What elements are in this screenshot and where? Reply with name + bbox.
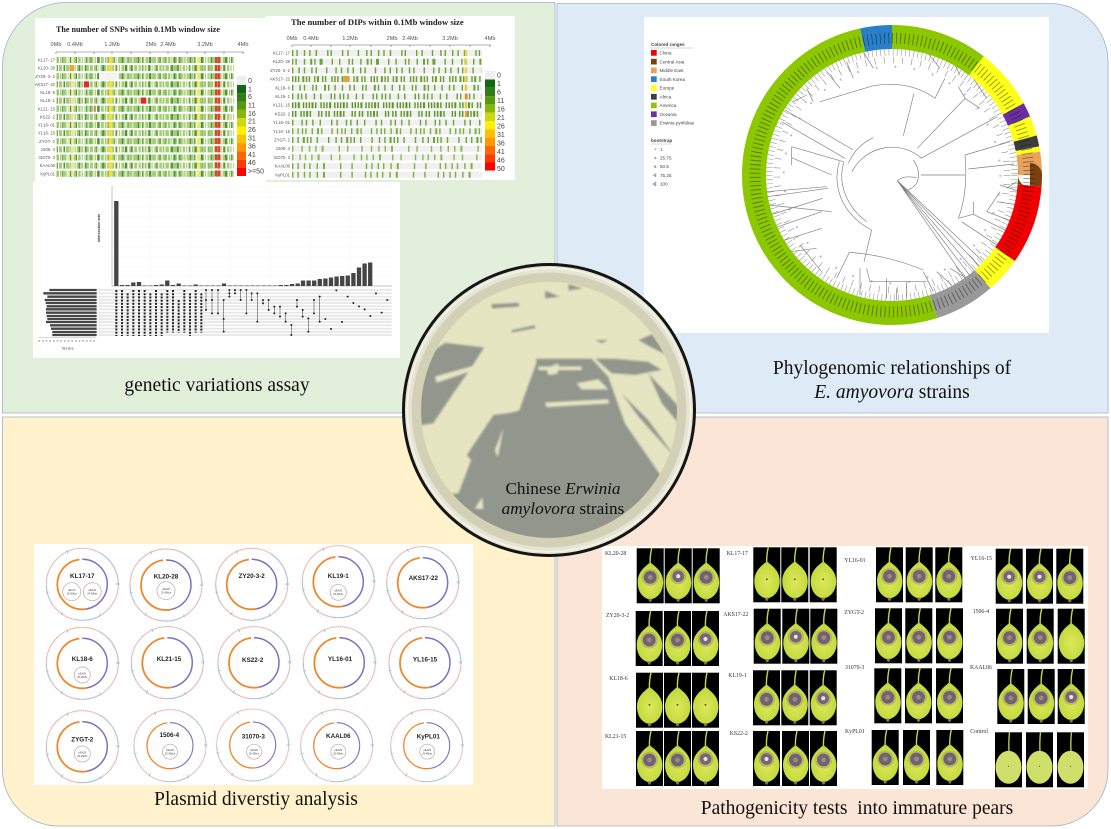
- test: ZY20-3-2: ZY20-3-2: [606, 613, 629, 619]
- caption: phylogenomic relationships: Phylogenomic relationships of: [773, 358, 1012, 379]
- map: 1506-4: pEA29: [166, 749, 174, 752]
- map: KL20-28: 25.45kbs: [161, 592, 172, 594]
- test: AKS17-22: AKS17-22: [723, 612, 749, 618]
- SNP legend: [237, 76, 264, 176]
- map: 31070-3: pEA29: [250, 749, 258, 752]
- DIP axis: 0.4Mb: [303, 36, 319, 42]
- map: KL19-1: pEA29: [335, 590, 343, 592]
- tree branches: [767, 52, 1020, 300]
- legend: colored ranges: Middle East: [660, 68, 684, 73]
- DIP axis: 2Mb: [387, 36, 397, 42]
- SNP legend: 6: [248, 94, 252, 101]
- colored range ring: [754, 37, 1030, 313]
- caption: phylogenomic relationships: [773, 358, 1012, 403]
- SNP row labels: KAAL06: [40, 163, 56, 168]
- SNP row labels: KL20- 28: [38, 66, 56, 71]
- DIP row labels: ZYGT- 2: [274, 138, 291, 142]
- SNP legend: 1: [248, 86, 252, 94]
- caption: phylogenomic relationships: E. amyovora strains: [813, 382, 970, 403]
- DIP legend: 16: [497, 106, 505, 114]
- map: 1506-4: 25.45kbs: [165, 752, 176, 756]
- test: KS22-2: [730, 731, 837, 786]
- SNP row labels: KyPL01: [40, 171, 56, 176]
- SNP axis: [51, 42, 248, 54]
- DIP rows: [292, 50, 482, 175]
- map: ZYGT-2: pEA29: [79, 751, 87, 754]
- map: KL20-28: [117, 536, 215, 634]
- DIP legend: 11: [497, 98, 504, 105]
- caption: plasmid diversity: Plasmid diverstiy analysis: [154, 789, 358, 810]
- SNP legend: >=50: [248, 168, 264, 176]
- legend: bootstrap: 25.75: [660, 156, 672, 160]
- test: KS22-2: KS22-2: [730, 731, 748, 737]
- SNP row labels: AKS17- 22: [35, 82, 56, 87]
- map: KL17-17: KL17-17: [70, 573, 95, 580]
- test: ZY20-3-2: [606, 611, 719, 666]
- map: KL18-6: 25.45kbs: [77, 676, 88, 679]
- DIP legend: 26: [497, 124, 505, 130]
- SNP row labels: KL21- 15: [38, 106, 56, 111]
- legend: colored ranges: Africa: [660, 94, 672, 99]
- dish caption: [502, 479, 625, 518]
- map: ZY20-3-2: [203, 535, 301, 633]
- legend: colored ranges: South Korea: [660, 77, 685, 82]
- DIP row labels: YL16- 01: [273, 120, 291, 125]
- map: 31070-3: [204, 696, 302, 794]
- SNP row labels: YL16- 01: [38, 122, 56, 128]
- map: KL17-17: 24.00kbs: [87, 592, 98, 596]
- map: AKS17-22: [374, 534, 472, 632]
- map: KL18-6: pEA29: [79, 672, 87, 675]
- DIP row labels: KL19- 1: [275, 94, 291, 99]
- panel: genetic variations: [2, 2, 555, 413]
- legend: colored ranges: Oceania: [660, 112, 677, 117]
- map: 31070-3: 31070-3: [242, 734, 265, 740]
- plasmid maps: [33, 533, 476, 796]
- SNP axis: 2.4Mb: [160, 42, 176, 48]
- map: KL18-6: [33, 614, 131, 712]
- heading: DIPs: The number of DIPs within 0.1Mb window size: [291, 17, 464, 27]
- DIP legend: [485, 71, 505, 173]
- SNP axis: 2Mb: [146, 42, 156, 48]
- DIP row labels: [270, 50, 291, 177]
- test: ZYGT-2: [844, 608, 963, 663]
- legend: bootstrap: 100: [660, 182, 668, 186]
- map: KL19-1: KL19-1: [328, 573, 349, 580]
- legend: bootstrap: 50.5: [660, 164, 669, 169]
- panel: pathogenicity: [557, 417, 1108, 826]
- map: 1506-4: [121, 697, 219, 795]
- map: ZY20-3-2: ZY20-3-2: [239, 573, 265, 580]
- test: KL20-28: [605, 548, 720, 603]
- DIP legend: 50: [497, 166, 505, 173]
- test: KL18-6: KL18-6: [609, 676, 628, 682]
- test: Control: [970, 729, 1084, 787]
- map: KL18-6: KL18-6: [72, 656, 93, 663]
- test: KL19-1: [728, 670, 837, 725]
- test: 1506-4: 1506-4: [973, 609, 989, 615]
- heading: SNPs: The number of SNPs within 0.1Mb window size: [56, 25, 220, 34]
- dish body and bacterial growth: [402, 263, 696, 560]
- SNP axis: 1.2Mb: [104, 42, 120, 48]
- map: YL16-15: [376, 614, 474, 712]
- DIP row labels: AKS17- 22: [270, 77, 291, 82]
- map: KL17-17: pEA29: [89, 589, 97, 592]
- test: ZYGT-2: ZYGT-2: [844, 610, 864, 616]
- map: 31070-3: 25.45kbs: [249, 752, 260, 756]
- DIP legend: 1: [497, 81, 501, 88]
- UpSet bars: [116, 201, 370, 286]
- SNP row labels: ZYGT- 2: [39, 139, 56, 144]
- map: KL21-15: KL21-15: [157, 656, 182, 663]
- map: KL17-17: pEA72: [68, 589, 76, 592]
- map: ZYGT-2: 25.45kbs: [77, 755, 88, 758]
- legend: bootstrap: bootstrap: [651, 138, 672, 143]
- DIP row labels: KAAL06: [275, 164, 291, 169]
- map: KAAL06: pEA29: [335, 749, 343, 752]
- legend: colored ranges: Europe: [660, 86, 675, 91]
- SNP row labels: 31070- 3: [38, 155, 56, 160]
- legend: colored ranges: America: [660, 103, 677, 108]
- SNP legend: 0: [248, 78, 252, 85]
- map: KL17-17: 25.00kbs: [67, 592, 78, 596]
- dish caption: amylovora strains: [502, 499, 625, 518]
- SNP row labels: KL19- 1: [40, 98, 56, 103]
- SNP row labels: KS22- 2: [40, 114, 56, 119]
- test: YL16-01: [844, 547, 962, 602]
- DIP legend: 21: [497, 115, 505, 122]
- SNP row labels: 1506- 4: [41, 147, 56, 152]
- DIP row labels: KL18- 6: [275, 85, 291, 90]
- SNP row labels: YL16- 15: [38, 131, 56, 136]
- map: KL20-28: pEA29: [162, 588, 170, 591]
- SNP legend: 11: [248, 102, 255, 110]
- map: AKS17-22: AKS17-22: [409, 575, 438, 582]
- pear tests: [605, 547, 1085, 787]
- SNP legend: 21: [248, 118, 256, 126]
- DIP row labels: KS22- 2: [275, 111, 291, 116]
- test: YL16-15: [971, 549, 1083, 604]
- SNP legend: 26: [248, 127, 256, 134]
- legend: bootstrap: 1: [660, 147, 663, 152]
- dish caption: Chinese Erwinia: [505, 479, 621, 498]
- map: KAAL06: KAAL06: [326, 733, 351, 740]
- caption: pathogenicity tests: Pathogenicity tests into immature pears: [701, 798, 1013, 819]
- test: KyPL01: [845, 729, 963, 785]
- test: Control: Control: [970, 729, 988, 735]
- map: KS22-2: [205, 614, 303, 712]
- panel: phylogeny: [557, 4, 1108, 413]
- UpSet set-size bars and dot matrix: [38, 289, 392, 350]
- test: KL20-28: KL20-28: [605, 551, 626, 557]
- map: ZYGT-2: [33, 698, 131, 796]
- map: KS22-2: KS22-2: [242, 657, 264, 664]
- legend: colored ranges: Colored ranges: [651, 42, 685, 47]
- DIP row labels: 1506- 4: [276, 146, 291, 151]
- SNP heatmap: [35, 18, 266, 182]
- map: KyPL01: pEA29: [424, 749, 432, 752]
- UpSet set-size bars and dot matrix: Set size: [62, 346, 74, 350]
- test: 31070-3: 31070-3: [845, 665, 864, 671]
- map: KL21-15: [118, 614, 216, 712]
- legend: colored ranges: Erwinia pyrifoliae: [660, 121, 695, 126]
- SNP axis: 3.2Mb: [197, 42, 213, 48]
- test: 1506-4: [973, 609, 1085, 664]
- DIP row labels: KyPL01: [275, 172, 291, 177]
- map: KL20-28: KL20-28: [154, 574, 179, 580]
- map: KAAL06: 25.45kbs: [333, 752, 344, 756]
- map: YL16-01: [290, 614, 388, 712]
- SNP rows: [56, 57, 234, 177]
- legend: colored ranges: China: [660, 50, 672, 56]
- SNP legend: 16: [248, 111, 256, 118]
- test: KL18-6: [609, 673, 719, 728]
- central petri dish: [402, 263, 696, 560]
- map: KyPL01: KyPL01: [417, 734, 440, 740]
- map: KL19-1: 25.45kbs: [333, 593, 344, 596]
- SNP axis: 0Mb: [51, 42, 61, 48]
- test: YL16-15: YL16-15: [971, 556, 992, 562]
- DIP legend: 0: [497, 72, 501, 80]
- DIP axis: 3.2Mb: [442, 36, 458, 42]
- map: KyPL01: [378, 697, 476, 795]
- legend: colored ranges: Central Asia: [660, 59, 685, 64]
- caption: genetic variations assay: genetic variations assay: [124, 375, 310, 396]
- DIP row labels: KL20- 28: [273, 59, 291, 64]
- SNP legend: 46: [248, 160, 256, 167]
- DIP legend: 46: [497, 158, 505, 164]
- DIP legend: 36: [497, 140, 505, 148]
- legend: bootstrap: [651, 138, 672, 186]
- test: KL21-15: KL21-15: [605, 734, 626, 740]
- SNP legend: 41: [248, 152, 256, 159]
- panel: plasmid diversity: [2, 417, 555, 826]
- test: KAAL06: [970, 665, 1085, 724]
- SNP row labels: ZY20- 3- 2: [35, 74, 56, 79]
- SNP axis: 0.4Mb: [67, 42, 83, 48]
- DIP row labels: KL21- 15: [273, 103, 291, 108]
- legend: bootstrap: 75.25: [660, 173, 672, 178]
- SNP legend: 36: [248, 144, 256, 150]
- UpSet plot: [33, 182, 400, 358]
- DIP axis: 2.4Mb: [402, 36, 418, 42]
- map: KL19-1: [289, 533, 387, 631]
- map: YL16-01: YL16-01: [328, 656, 353, 663]
- map: KAAL06: [288, 697, 386, 795]
- UpSet grid and axis: Intersection size: [97, 214, 101, 242]
- test: KL21-15: [605, 731, 719, 786]
- DIP legend: 6: [497, 90, 501, 96]
- map: YL16-15: YL16-15: [413, 656, 438, 664]
- DIP row labels: KL17- 17: [273, 50, 291, 56]
- SNP row labels: [35, 58, 56, 176]
- DIP axis: 0Mb: [287, 36, 297, 42]
- test: AKS17-22: [723, 609, 837, 664]
- DIP axis: 4Mb: [485, 36, 495, 42]
- legend: colored ranges: [651, 42, 695, 126]
- SNP row labels: KL18- 6: [40, 90, 56, 95]
- phylogenetic tree: [754, 37, 1030, 313]
- test: KL19-1: KL19-1: [728, 673, 747, 679]
- DIP row labels: 31070- 3: [273, 155, 291, 160]
- DIP row labels: ZY20- 3- 2: [270, 68, 291, 73]
- test: KyPL01: KyPL01: [845, 729, 865, 735]
- map: KL17-17: [33, 535, 131, 633]
- SNP legend: 31: [248, 136, 256, 142]
- DIP legend: 41: [497, 149, 505, 156]
- DIP row labels: YL16- 15: [273, 129, 291, 134]
- map: ZYGT-2: ZYGT-2: [71, 736, 94, 744]
- test: 31070-3: [845, 665, 963, 723]
- test: YL16-01: YL16-01: [844, 558, 866, 564]
- map: 1506-4: 1506-4: [159, 732, 180, 739]
- DIP heatmap: [266, 16, 515, 180]
- DIP legend: 31: [497, 132, 505, 139]
- SNP axis: 4Mb: [238, 42, 248, 48]
- SNP row labels: KL17- 17: [38, 58, 56, 62]
- UpSet grid and axis: [97, 186, 392, 286]
- test: KAAL06: KAAL06: [970, 665, 992, 671]
- DIP axis: [287, 36, 495, 47]
- map: KyPL01: 25.45kbs: [422, 752, 433, 756]
- DIP axis: 1.2Mb: [342, 36, 358, 42]
- test: KL17-17: [727, 547, 837, 602]
- test: KL17-17: KL17-17: [727, 551, 748, 557]
